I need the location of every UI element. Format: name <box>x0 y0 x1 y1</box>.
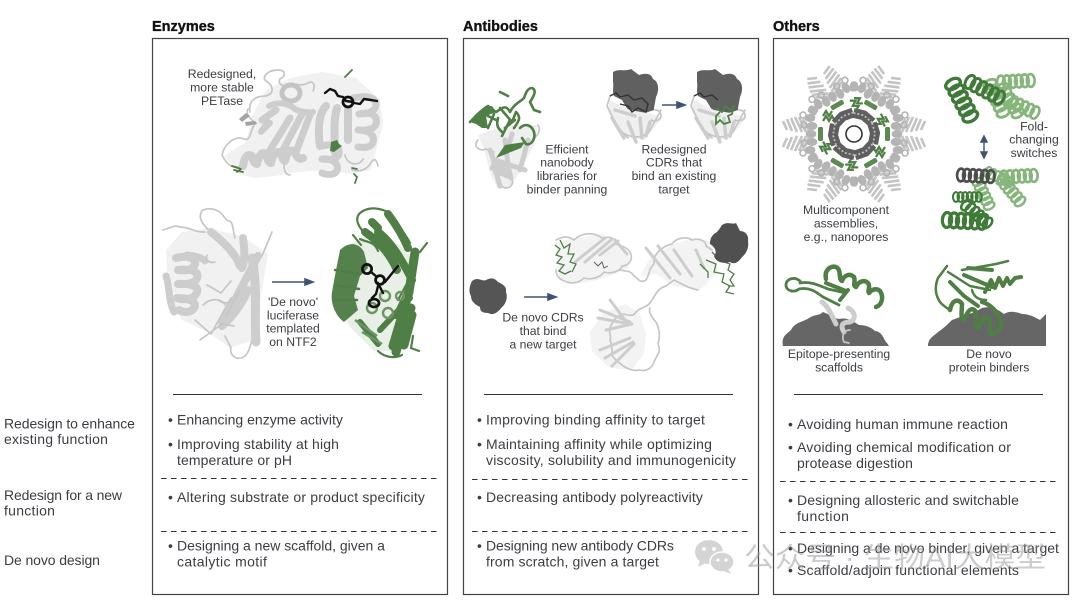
icon: green de novo luciferase <box>332 208 427 357</box>
text block: de novo, antibodies: Designing new antibody CDRs <box>486 538 674 554</box>
text block: de novo, others: Designing a de novo binder, given a target <box>797 540 1059 556</box>
row label: redesign for a new function: function <box>4 502 55 518</box>
label: nanobody: Efficient <box>545 142 589 156</box>
icon: antibody structure <box>555 223 748 371</box>
label: de novo CDRs <box>502 310 584 352</box>
label: luciferase: luciferase <box>267 308 319 322</box>
label: de novo CDRs: that bind <box>520 324 566 338</box>
label: luciferase: 'De novo' <box>268 295 318 309</box>
watermark: 公众号 · 生物AI大模型 <box>744 542 1046 573</box>
icon: fold switch state one <box>944 74 1041 124</box>
label: assemblies: e.g., nanopores <box>804 230 888 244</box>
label: redesigned CDRs: Redesigned <box>641 142 707 156</box>
text block: redesign to enhance, others: • <box>788 416 793 432</box>
label: nanobody: libraries for <box>537 169 597 183</box>
text block: new function, antibodies: • <box>477 489 482 505</box>
text block: redesign to enhance, antibodies <box>477 412 736 468</box>
label: PETase <box>188 67 256 108</box>
label: nanobody: nanobody <box>540 156 595 170</box>
text block: de novo, enzymes: • <box>168 538 173 554</box>
label: assemblies: assemblies, <box>814 216 878 230</box>
row label: redesign to enhance existing function: Redesign to enhance <box>4 416 135 432</box>
icon: epitope-presenting scaffold <box>783 267 889 346</box>
icon: existing target complex before <box>607 69 662 142</box>
label: nanobody: binder panning <box>527 182 607 196</box>
label: assemblies: Multicomponent <box>803 203 890 217</box>
solid divider <box>484 394 733 396</box>
label: switches: changing <box>1009 132 1059 146</box>
label: PETase: Redesigned, <box>188 67 256 81</box>
label: PETase: PETase <box>201 94 243 108</box>
text block: de novo, others: • <box>788 562 793 578</box>
label: epitope scaffolds: Epitope-presenting <box>788 347 890 361</box>
heading: Others: Others <box>773 19 820 35</box>
heading: Antibodies: Antibodies <box>463 19 538 35</box>
label: switches: switches <box>1011 146 1057 160</box>
label: de novo CDRs: a new target <box>509 338 577 352</box>
panel: antibodies <box>464 38 758 594</box>
icon: new target <box>469 278 507 314</box>
icon: ligand <box>325 89 377 104</box>
icon: de novo protein binder <box>928 261 1046 346</box>
label: redesigned CDRs <box>632 142 716 196</box>
text block: redesign to enhance, others: • <box>788 439 793 455</box>
text block: redesign to enhance, enzymes: temperature or pH <box>177 452 292 468</box>
label: redesigned CDRs: target <box>658 182 690 196</box>
text block: de novo, antibodies: • <box>477 538 482 554</box>
text block: redesign to enhance, antibodies: • <box>477 412 482 428</box>
text block: de novo, others: • <box>788 540 793 556</box>
text block: de novo, others: Scaffold/adjoin functional elements <box>797 562 1019 578</box>
text block: de novo, antibodies <box>477 538 674 570</box>
label: epitope scaffolds: scaffolds <box>815 360 863 374</box>
arrow: to de novo luciferase <box>272 279 313 285</box>
label: redesigned CDRs: bind an existing <box>632 169 716 183</box>
row label: redesign for a new function: Redesign for a new <box>4 487 123 503</box>
label: binders <box>949 347 1029 374</box>
text block: redesign to enhance, enzymes: • <box>168 412 173 428</box>
icon: PETase protein structure <box>222 70 383 183</box>
arrow: de novo CDRs <box>524 294 556 300</box>
text block: redesign to enhance, antibodies: viscosity, solubility and immunogenicity <box>486 452 736 468</box>
label: PETase: more stable <box>190 80 254 94</box>
text block: redesign to enhance, others <box>788 416 1011 471</box>
text block: de novo, antibodies: from scratch, given a target <box>486 554 659 570</box>
text block: redesign to enhance, others: Avoiding chemical modification or <box>797 439 1011 455</box>
text block: new function, others: • <box>788 492 793 508</box>
row label: de novo design: De novo design <box>4 552 100 568</box>
text block: de novo, enzymes <box>168 538 385 570</box>
row label: redesign to enhance existing function: existing function <box>4 431 108 447</box>
label: luciferase: templated <box>266 322 320 336</box>
icon: gray NTF2 scaffold <box>163 209 272 358</box>
text block: redesign to enhance, others: protease digestion <box>797 455 913 471</box>
text block: new function, others: function <box>797 508 849 524</box>
icon: luciferin ligand <box>362 264 398 307</box>
text block: new function, enzymes: • <box>168 489 173 505</box>
text block: redesign to enhance, others: Avoiding human immune reaction <box>797 416 1008 432</box>
text block: redesign to enhance, antibodies: Maintaining affinity while optimizing <box>486 436 712 452</box>
text block: new function, antibodies: Decreasing antibody polyreactivity <box>486 489 703 505</box>
icon: existing target complex after <box>691 69 746 142</box>
icon: nanobody <box>470 88 540 189</box>
panel: others <box>774 38 1068 594</box>
label: binders: protein binders <box>949 360 1029 374</box>
label: switches: Fold- <box>1020 120 1048 134</box>
label: epitope scaffolds <box>788 347 890 374</box>
heading: Enzymes: Enzymes <box>152 19 215 35</box>
text block: redesign to enhance, enzymes: Enhancing enzyme activity <box>177 412 343 428</box>
text block: new function, others: Designing allosteric and switchable <box>797 492 1019 508</box>
row label: redesign for a new function <box>4 487 123 518</box>
panel: enzymes <box>152 38 448 594</box>
label: nanobody <box>527 142 607 196</box>
solid divider <box>794 394 1043 396</box>
arrow: redesigned CDRs <box>662 102 685 108</box>
label: luciferase <box>266 295 320 349</box>
label: assemblies <box>803 203 890 244</box>
icon: fold switch state two <box>942 166 1038 230</box>
text block: redesign to enhance, enzymes <box>168 412 343 468</box>
text block: redesign to enhance, enzymes: • <box>168 436 173 452</box>
label: binders: De novo <box>966 347 1012 361</box>
text block: redesign to enhance, antibodies: • <box>477 436 482 452</box>
solid divider <box>173 394 422 396</box>
label: switches <box>1009 120 1059 160</box>
text block: redesign to enhance, antibodies: Improving binding affinity to target <box>486 412 705 428</box>
arrow: double arrow switch <box>981 136 987 158</box>
icon: wechat logo <box>695 540 734 574</box>
text block: new function, others <box>788 492 1019 524</box>
row label: redesign to enhance existing function <box>4 416 135 447</box>
text block: redesign to enhance, enzymes: Improving stability at high <box>177 436 339 452</box>
label: luciferase: on NTF2 <box>269 335 317 349</box>
text block: de novo, enzymes: Designing a new scaffold, given a <box>177 538 385 554</box>
label: de novo CDRs: De novo CDRs <box>502 310 584 324</box>
text block: de novo, others <box>788 540 1059 578</box>
text block: new function, enzymes: Altering substrate or product specificity <box>177 489 425 505</box>
label: redesigned CDRs: CDRs that <box>646 156 703 170</box>
icon: nanopore assembly <box>783 59 925 209</box>
text block: de novo, enzymes: catalytic motif <box>177 554 267 570</box>
